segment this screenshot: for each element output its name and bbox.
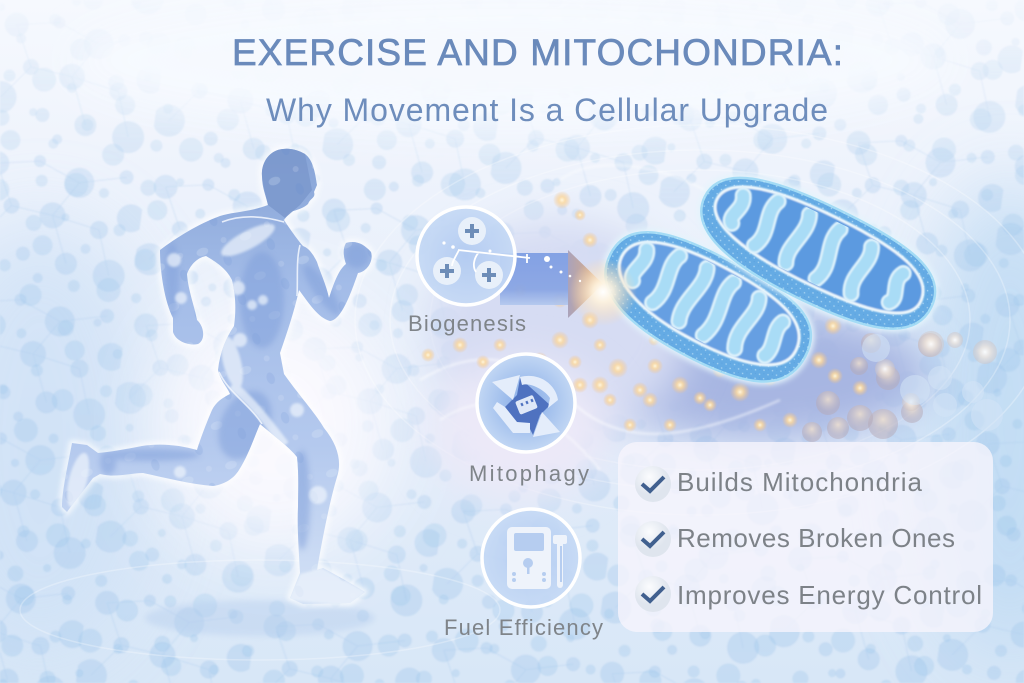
head shading xyxy=(262,149,312,218)
mitophagy label: Mitophagy xyxy=(469,461,589,486)
glow behind mitochondria xyxy=(420,165,930,500)
connector dots xyxy=(442,241,581,282)
muscle and vessel detail xyxy=(64,164,372,604)
connector line xyxy=(452,250,530,272)
mitophagy icon xyxy=(477,354,575,452)
mitochondrion lower left xyxy=(585,210,828,405)
subtitle: Why Movement Is a Cellular Upgrade xyxy=(266,92,828,128)
title: EXERCISE AND MITOCHONDRIA: xyxy=(232,32,843,73)
fuel efficiency icon xyxy=(482,509,580,607)
biogenesis label: Biogenesis xyxy=(408,311,526,336)
body silhouette xyxy=(62,149,372,604)
light flare at arrow tip xyxy=(569,258,637,326)
plus circles xyxy=(433,217,503,289)
fuel efficiency label: Fuel Efficiency xyxy=(444,615,603,640)
bokeh particles xyxy=(421,191,1003,442)
arrow into mitochondria xyxy=(500,250,603,318)
item: improves energy control: Improves Energy Control xyxy=(677,580,982,610)
fuel pump xyxy=(507,527,567,589)
recycle arrows xyxy=(492,375,560,437)
panel: benefits checklist xyxy=(618,442,993,632)
item: builds mitochondria: Builds Mitochondria xyxy=(677,467,923,497)
item: removes broken ones: Removes Broken Ones xyxy=(677,523,955,553)
mitochondrion upper right xyxy=(683,155,952,352)
runner figure xyxy=(50,140,390,610)
biogenesis icon xyxy=(417,207,581,305)
runner glow xyxy=(62,149,372,604)
